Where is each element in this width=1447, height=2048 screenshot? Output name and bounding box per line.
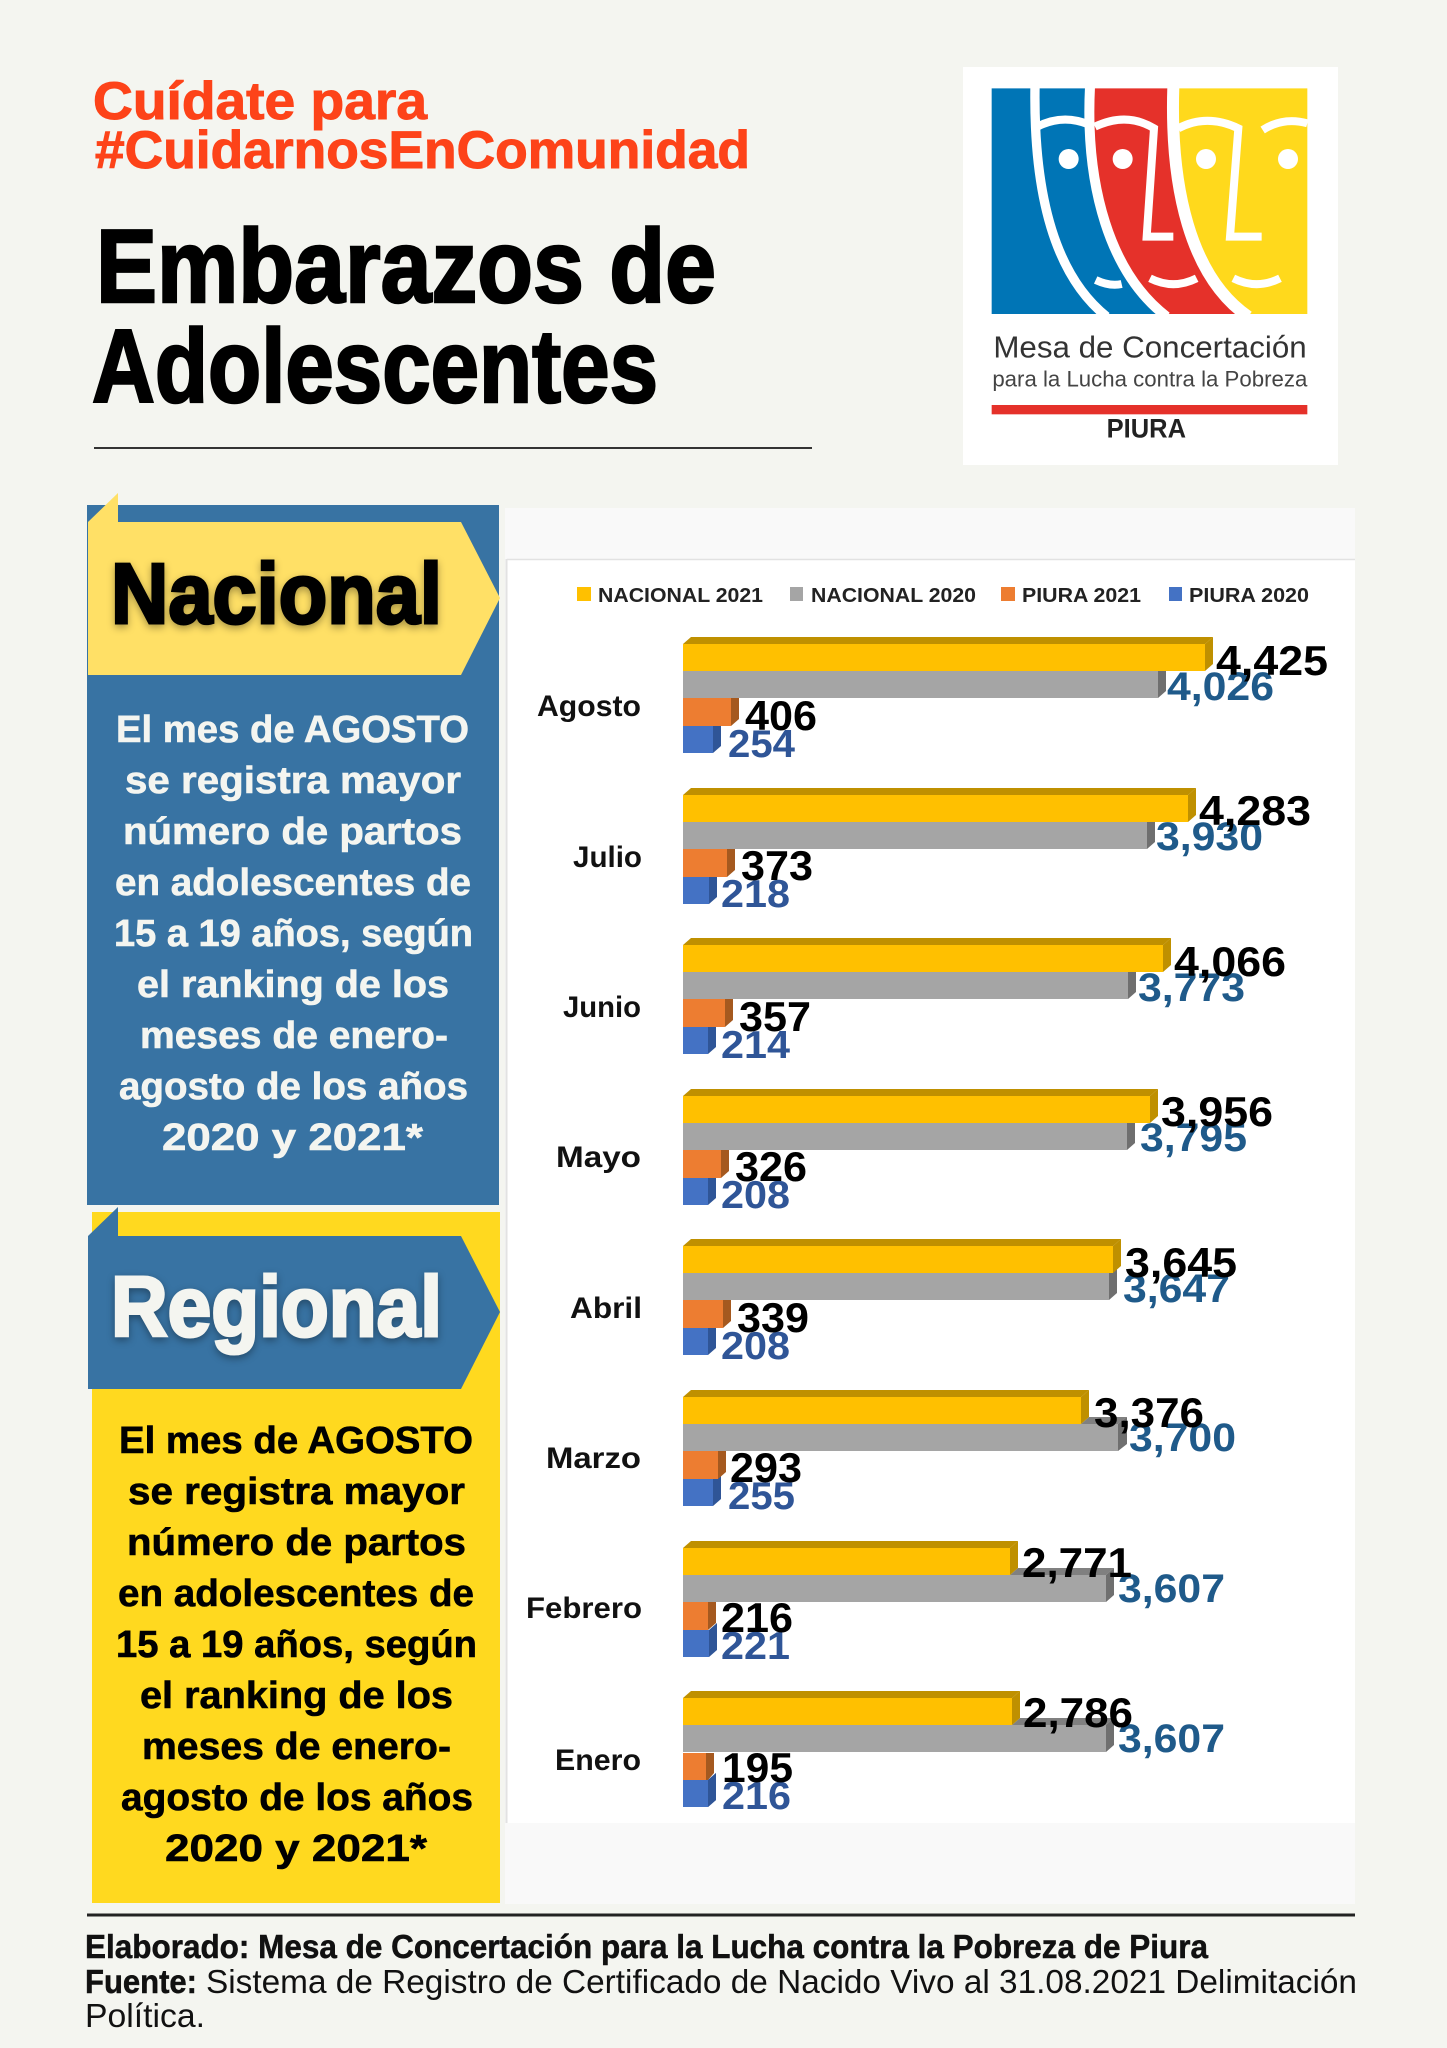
title — [92, 209, 716, 425]
ribbon: Nacional — [88, 493, 500, 675]
group: Junio: 357 — [739, 993, 811, 1040]
text block: Nacional: agosto de los años — [119, 1066, 468, 1108]
group: Agosto — [537, 637, 1328, 766]
title: Embarazos de — [96, 209, 716, 325]
group: Febrero: 2,771 — [1022, 1539, 1132, 1586]
group: Abril: 3,645 — [1125, 1239, 1237, 1286]
group: Marzo: 3,700 — [1129, 1416, 1236, 1460]
title: Adolescentes — [92, 309, 658, 425]
ribbon: Regional — [88, 1207, 500, 1389]
chart: partos en adolescentes por mes — [506, 559, 1355, 1823]
text block: Regional: número de partos — [127, 1522, 466, 1564]
group: Junio — [563, 938, 1286, 1067]
group: Julio: 4,283 — [1199, 787, 1311, 834]
group: Mayo: 3,795 — [1140, 1116, 1247, 1160]
logo: Mesa de Concertación Piura: Mesa de Concertación — [993, 331, 1307, 365]
logo: Mesa de Concertación Piura — [963, 67, 1338, 465]
ribbon: Regional: Regional — [111, 1260, 442, 1355]
group: Agosto: 254 — [728, 723, 795, 766]
group: Febrero: Febrero — [526, 1592, 642, 1625]
text block: Regional: 2020 y 2021* — [165, 1828, 427, 1870]
group: Marzo: 3,376 — [1094, 1389, 1204, 1436]
text block: Regional: agosto de los años — [121, 1777, 473, 1819]
group: Julio: 218 — [721, 873, 790, 916]
footer: source notes: Política. — [85, 1997, 205, 2034]
ribbon: Nacional: Nacional — [111, 547, 442, 642]
text block: Nacional: El mes de AGOSTO — [116, 709, 469, 751]
text block: Nacional: 15 a 19 años, según — [114, 913, 473, 955]
group: Marzo: Marzo — [546, 1442, 641, 1475]
legend: NACIONAL 2021 — [598, 585, 763, 607]
text block: Nacional: en adolescentes de — [115, 862, 471, 904]
group: Agosto: 4,425 — [1216, 637, 1328, 684]
legend: PIURA 2021 — [1022, 585, 1141, 607]
group: Febrero: 3,607 — [1118, 1567, 1225, 1611]
group: Enero — [555, 1689, 1225, 1818]
tagline: #CuidarnosEnComunidad — [95, 121, 750, 180]
legend: NACIONAL 2020 — [811, 585, 976, 607]
footer: source notes: Sistema de Registro de Certificado de Nacido Vivo al 31.08.2021 Delimitación — [206, 1963, 1357, 2000]
group: Mayo: 326 — [735, 1143, 807, 1190]
group: Abril — [570, 1239, 1237, 1368]
tagline — [93, 72, 750, 180]
group: Julio — [573, 787, 1311, 916]
group: Agosto: 4,026 — [1167, 665, 1274, 709]
group: Mayo — [556, 1088, 1273, 1217]
group: Junio: Junio — [563, 991, 641, 1024]
group: Junio: 4,066 — [1174, 938, 1286, 985]
group: Abril: 208 — [721, 1325, 790, 1368]
footer: source notes — [85, 1928, 1357, 2034]
group: Mayo: Mayo — [556, 1141, 641, 1174]
group: Mayo: 208 — [721, 1174, 790, 1217]
text block: Regional: 15 a 19 años, según — [116, 1624, 477, 1666]
text block: Regional: meses de enero- — [142, 1726, 451, 1768]
group: Enero: Enero — [555, 1744, 641, 1777]
chart background panel — [505, 508, 1355, 1904]
text block: Regional: se registra mayor — [128, 1471, 465, 1513]
legend: PIURA 2020 — [1189, 585, 1309, 607]
group: Julio: Julio — [573, 841, 642, 874]
group: Enero: 216 — [722, 1775, 791, 1818]
group: Junio: 3,773 — [1138, 966, 1245, 1010]
group: Febrero: 216 — [721, 1594, 793, 1641]
text block: Nacional: el ranking de los — [137, 964, 449, 1006]
logo: Mesa de Concertación Piura: para la Lucha contra la Pobreza — [992, 367, 1308, 392]
group: Abril: Abril — [570, 1292, 642, 1325]
group: Marzo: 255 — [728, 1475, 795, 1518]
logo: Mesa de Concertación Piura: PIURA — [1107, 413, 1186, 443]
text block: Nacional: número de partos — [123, 811, 462, 853]
panel: Nacional — [87, 493, 500, 1205]
group: Marzo: 293 — [730, 1444, 802, 1491]
group: Julio: 373 — [741, 842, 813, 889]
group: Junio: 214 — [721, 1024, 790, 1067]
text block: Regional: en adolescentes de — [118, 1573, 474, 1615]
group: Julio: 3,930 — [1156, 815, 1263, 859]
legend — [577, 585, 1309, 607]
text block: Regional — [116, 1420, 477, 1870]
text block: Nacional: 2020 y 2021* — [162, 1117, 423, 1159]
group: Agosto: 406 — [745, 692, 817, 739]
group: Enero: 2,786 — [1023, 1689, 1133, 1736]
group: Abril: 3,647 — [1123, 1267, 1230, 1311]
group: Febrero: 221 — [721, 1625, 790, 1668]
group: Enero: 195 — [722, 1744, 793, 1791]
text block: Nacional: se registra mayor — [125, 760, 461, 802]
group: Febrero — [526, 1539, 1225, 1668]
footer: source notes: Fuente: — [85, 1963, 197, 2000]
text block: Regional: El mes de AGOSTO — [119, 1420, 473, 1462]
group: Enero: 3,607 — [1118, 1717, 1225, 1761]
text block: Regional: el ranking de los — [140, 1675, 453, 1717]
group: Agosto: Agosto — [537, 690, 641, 723]
footer: source notes: Elaborado: Mesa de Concertación para la Lucha contra la Pobreza de Piura — [85, 1928, 1209, 1965]
panel: Regional — [88, 1207, 500, 1903]
text block: Nacional — [114, 709, 473, 1159]
tagline: Cuídate para — [93, 72, 428, 131]
text block: Nacional: meses de enero- — [140, 1015, 448, 1057]
group: Abril: 339 — [737, 1294, 809, 1341]
group: Marzo — [546, 1389, 1236, 1518]
group: Mayo: 3,956 — [1161, 1088, 1273, 1135]
